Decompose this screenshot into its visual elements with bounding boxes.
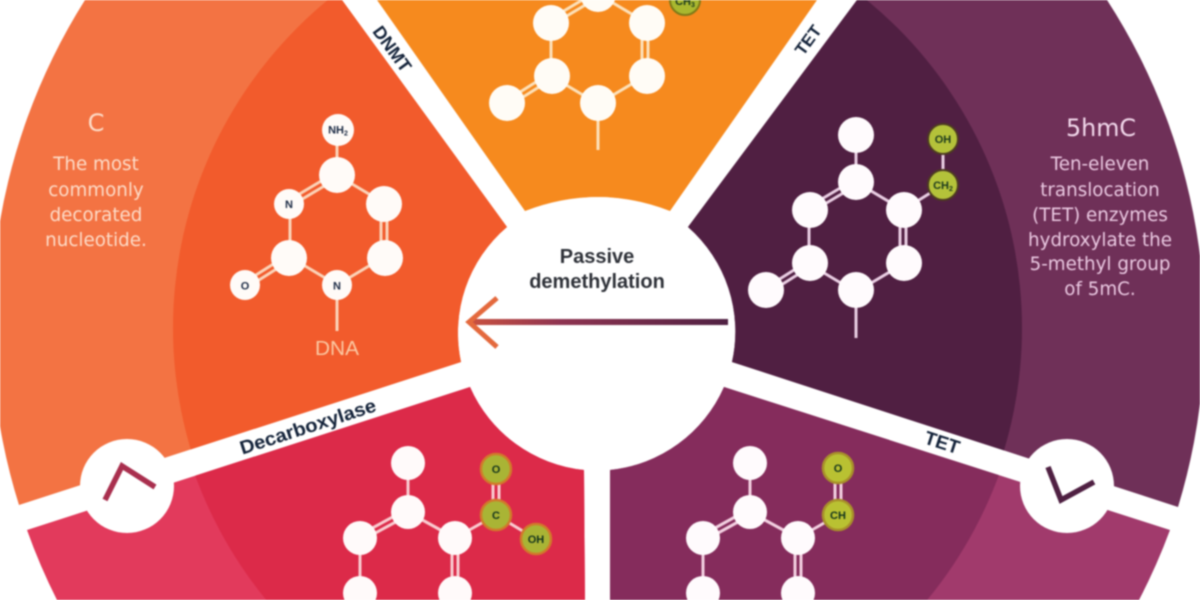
panel: 5hmC segment <box>687 0 1200 508</box>
carboxyl group: 5caC: O <box>492 464 501 476</box>
node: left chevron <box>80 439 174 533</box>
text: C heading: C <box>88 109 104 137</box>
center circle <box>467 197 729 459</box>
label: TET enzyme bottom: TET <box>922 428 963 459</box>
hydroxymethyl group: 5hmC: 2 <box>949 186 953 193</box>
text: 5hmC description: of 5mC. <box>1064 279 1136 300</box>
atom labels: cytosine: N <box>333 280 341 292</box>
panel: 5caC segment <box>26 386 586 600</box>
carboxyl group: 5caC: C <box>492 510 500 522</box>
text: C description: The most <box>52 154 139 175</box>
text: Passive demethylation: demethylation <box>529 271 665 293</box>
molecule: 5caC <box>343 446 551 600</box>
text: C description: commonly <box>48 180 144 201</box>
label: Decarboxylase enzyme: Decarboxylase <box>237 396 379 459</box>
text: 5hmC description: (TET) enzymes <box>1032 205 1168 226</box>
text: C description: decorated <box>50 205 142 226</box>
text: 5hmC description: 5-methyl group <box>1030 254 1170 275</box>
formyl group: 5fC: CH <box>830 510 846 522</box>
panel: 5mC segment <box>377 0 817 211</box>
molecule: cytosine <box>230 114 403 331</box>
molecule: 5fC <box>686 446 853 600</box>
text: Passive demethylation: Passive <box>560 246 634 268</box>
arrow: passive demethylation <box>469 298 728 347</box>
atom labels: cytosine: NH <box>328 124 344 136</box>
label: DNMT enzyme: DNMT <box>369 22 415 76</box>
hydroxymethyl group: 5hmC: OH <box>935 134 951 146</box>
text: C description: nucleotide. <box>45 230 147 251</box>
text: 5hmC description: hydroxylate the <box>1028 230 1172 251</box>
text: 5hmC description: translocation <box>1040 180 1160 201</box>
hydroxymethyl group: 5hmC: CH <box>933 180 949 192</box>
text: 5hmC description: Ten-eleven <box>1050 154 1149 175</box>
text: 5hmC heading: 5hmC <box>1066 114 1136 142</box>
panel: C segment <box>0 0 508 506</box>
label: DNA: DNA <box>315 338 360 360</box>
molecule: 5mC <box>489 0 700 150</box>
node: right chevron <box>1020 439 1114 533</box>
formyl group: 5fC: O <box>834 463 843 475</box>
hydroxymethyl group: 5hmC <box>928 124 958 200</box>
panel: 5fC segment <box>609 386 1171 600</box>
atom labels: cytosine <box>241 124 348 292</box>
methyl group: 5mC: 3 <box>691 2 695 9</box>
atom labels: cytosine: O <box>241 280 250 292</box>
carboxyl group: 5caC: OH <box>528 534 544 546</box>
molecule: 5hmC <box>748 117 958 338</box>
formyl group: 5fC <box>823 453 853 530</box>
carboxyl group: 5caC <box>481 454 551 554</box>
methyl group: 5mC <box>670 0 700 15</box>
atom labels: cytosine: N <box>285 199 293 211</box>
label: TET enzyme top: TET <box>791 21 826 59</box>
atom labels: cytosine: 2 <box>344 130 348 138</box>
